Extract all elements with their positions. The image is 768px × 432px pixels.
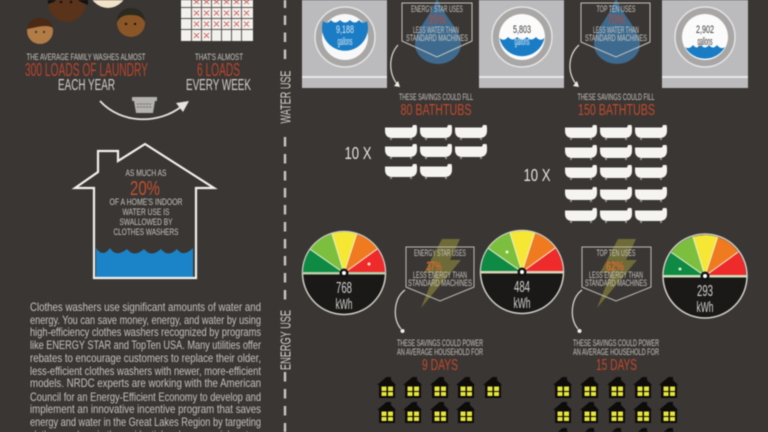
callout: energy star water savings [402,0,472,64]
text block: description paragraph: high-efficiency clothes washers recognized by programs [30,325,261,339]
icon: family faces [27,0,145,44]
gauge: 484 kWh: kWh [514,295,530,312]
gauge: 293 kWh: 293 [697,283,713,300]
text: 80 bathtubs: 80 BATHTUBS [400,102,472,119]
gauge: 768 kWh: kWh [336,296,352,313]
text: average family loads per year: 300 LOADS OF LAUNDRY [25,60,148,80]
washer: energy star 5,803 gallons: 5,803 [513,24,531,36]
callout: energy star water savings: 35% [428,12,446,27]
arrow: year to week with basket [100,97,189,119]
text: twenty percent of indoor water use: 20% [130,178,160,200]
text: 80 bathtubs: THESE SAVINGS COULD FILL [399,92,473,103]
houses: nine icons [377,377,502,423]
washer: standard machine 9,188 gallons: 9,188 [336,24,354,36]
text: average family loads per year: EACH YEAR [58,77,115,94]
callout: top ten water savings: TOP TEN USES [596,4,636,15]
text block: description paragraph: Council for an Energy-Efficient Economy to develop and [30,390,261,404]
text: 9 days: AN AVERAGE HOUSEHOLD FOR [397,347,483,358]
callout: energy star energy savings [406,239,474,308]
label: energy use: ENERGY USE [278,310,294,370]
callout: energy star energy savings: LESS ENERGY THAN [413,270,467,281]
text: average family loads per year [25,52,148,94]
gauge: 768 kWh [302,232,386,314]
gauge: 293 kWh: kWh [696,299,714,316]
text: loads per week: EVERY WEEK [186,77,251,94]
text: 15 days: 15 DAYS [596,357,637,374]
label: water use: WATER USE [278,70,294,124]
text block: description paragraph: Clothes washers use significant amounts of water and [30,300,261,314]
text: twenty percent of indoor water use: AS MUCH AS [126,168,166,179]
washer: top ten 2,902 gallons [662,0,748,88]
text: average family loads per year: THE AVERAGE FAMILY WASHES ALMOST [26,52,146,63]
callout: top ten water savings: STANDARD MACHINES [585,33,647,44]
text: 9 days [397,338,483,374]
gauge: 484 kWh: 484 [514,279,530,296]
arrow: energy star water savings [391,45,400,87]
gauge: 768 kWh: 768 [336,280,352,297]
callout: top ten energy savings: TOP TEN USES [596,248,636,259]
icon: house with water [75,144,214,278]
text: 80 bathtubs [399,92,473,119]
text: 150 bathtubs: 150 BATHTUBS [578,102,655,119]
bathtubs: fifteen icons [565,125,667,223]
text block: description paragraph: energy and water in the Great Lakes Region by targeting [30,415,261,429]
arrow: top ten water savings [570,45,579,87]
callout: energy star energy savings: 37% [426,258,442,274]
text block: description paragraph: like ENERGY STAR and TopTen USA. Many utilities offer [30,338,261,352]
text: loads per week: 6 LOADS [197,60,240,80]
text block: description paragraph: energy. You can save money, energy, and water by using [30,313,261,327]
text: twenty percent of indoor water use: OF A HOME'S INDOOR [110,197,183,208]
washer: standard machine 9,188 gallons [302,0,387,88]
washer: energy star 5,803 gallons [479,0,564,88]
text: twenty percent of indoor water use [110,168,183,238]
washer: top ten 2,902 gallons: 2,902 [696,24,714,36]
callout: top ten energy savings: LESS ENERGY THAN [589,270,643,281]
text: 9 days: THESE SAVINGS COULD POWER [397,338,483,349]
callout: top ten water savings: LESS WATER THAN [593,25,639,36]
washer: top ten 2,902 gallons: gallons [698,36,713,48]
text: 15 days: AN AVERAGE HOUSEHOLD FOR [573,347,659,358]
gauge: 293 kWh [663,234,747,318]
callout: top ten energy savings: 62% [606,258,624,274]
text: loads per week: THAT'S ALMOST [195,52,243,63]
text: twenty percent of indoor water use: WATER USE IS [122,207,170,218]
callout: top ten water savings: 70% [607,12,625,27]
houses: fifteen icons [553,377,678,432]
text: twenty percent of indoor water use: CLOTHES WASHERS [114,227,178,238]
icon: calendar grid of laundry loads [181,0,253,41]
text: 150 bathtubs [578,92,655,119]
text: twenty percent of indoor water use: SWALLOWED BY [120,217,173,228]
callout: top ten energy savings [582,239,651,308]
callout: top ten energy savings: STANDARD MACHINES [585,278,647,289]
text: 9 days: 9 DAYS [422,357,458,374]
washer: standard machine 9,188 gallons: gallons [338,36,353,48]
text block: description paragraph: implement an innovative incentive program that saves [30,402,261,416]
callout: energy star water savings: STANDARD MACHINES [406,33,468,44]
callout: energy star energy savings: ENERGY STAR USES [414,248,466,259]
text block: description paragraph [30,300,262,432]
text block: description paragraph: less-efficient clothes washers with newer, more-efficient [30,364,262,378]
arrow: top ten energy savings [572,290,582,333]
label: ten times, first group: 10 X [344,143,372,163]
callout: top ten water savings [581,0,650,64]
callout: energy star energy savings: STANDARD MACHINES [408,278,472,289]
text: 15 days: THESE SAVINGS COULD POWER [573,338,659,349]
label: ten times, second group: 10 X [524,165,551,185]
text: 15 days [573,338,659,374]
arrow: energy star energy savings [395,290,405,333]
text block: description paragraph: rebates to encourage customers to replace their older, [30,351,261,365]
gauge: 484 kWh [480,230,564,314]
bathtubs: eight icons [385,125,487,179]
callout: energy star water savings: ENERGY STAR USES [411,4,463,15]
callout: energy star water savings: LESS WATER THAN [413,25,459,36]
text: loads per week [186,52,251,94]
washer: energy star 5,803 gallons: gallons [514,36,530,48]
text block: description paragraph: models. NRDC experts are working with the American [30,376,261,390]
text: 150 bathtubs: THESE SAVINGS COULD FILL [578,92,654,103]
